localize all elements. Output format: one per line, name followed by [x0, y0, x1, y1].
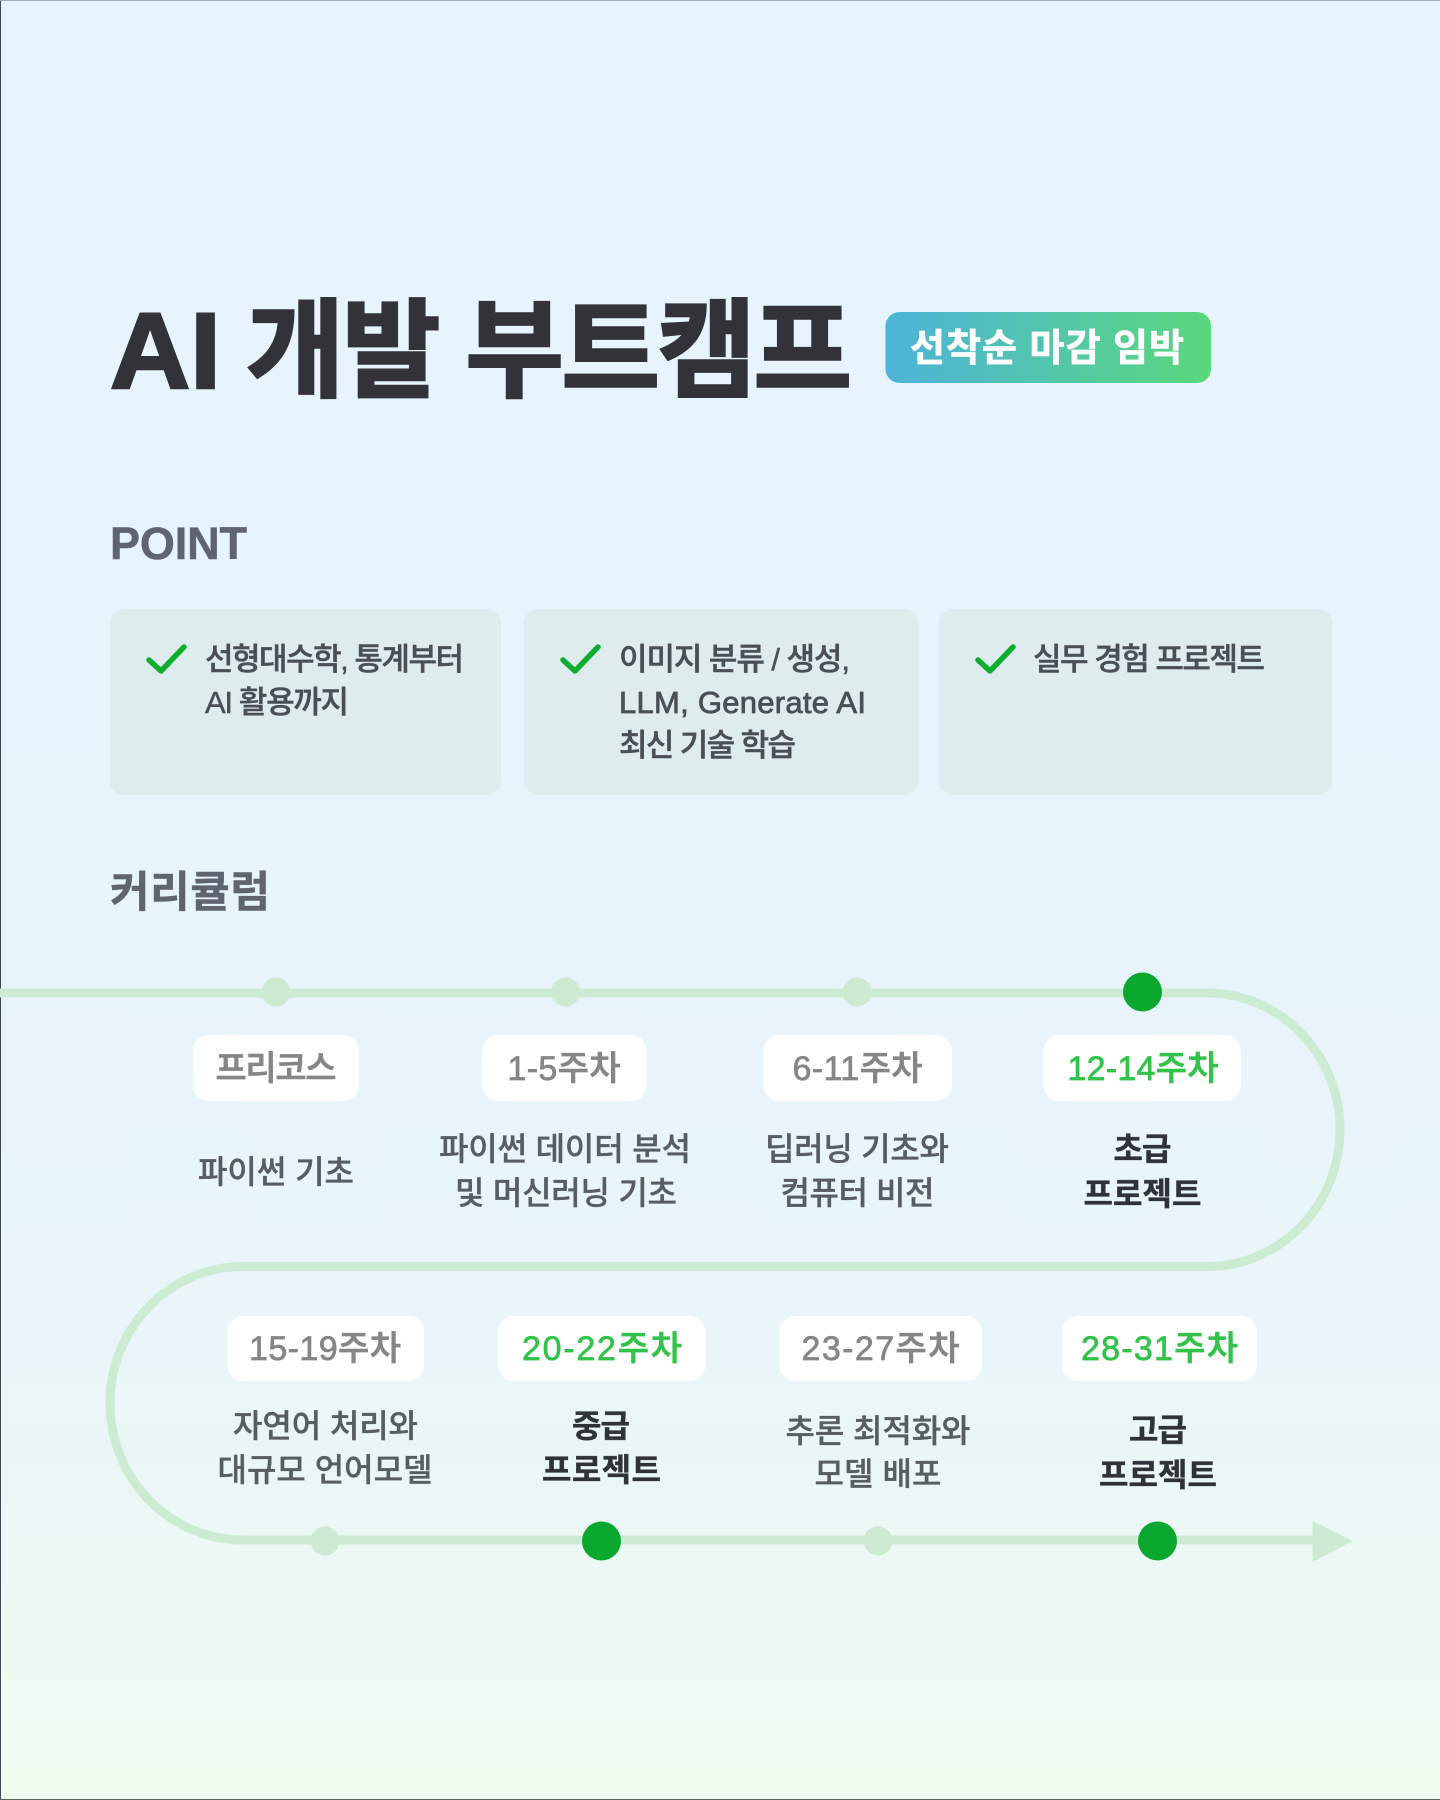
node: 12-14주차	[1123, 972, 1162, 1012]
step: 23-27주차: 모델 배포	[814, 1456, 942, 1492]
node: 프리코스	[262, 978, 290, 1006]
step: 12-14주차: 초급	[1114, 1131, 1172, 1167]
step: 12-14주차: 12-14주차	[1068, 1050, 1218, 1088]
step: 15-19주차: 15-19주차	[249, 1330, 401, 1368]
title: 개발 부트캠프	[246, 291, 852, 411]
step: 20-22주차: 20-22주차	[522, 1330, 682, 1368]
panel: point 1	[110, 609, 501, 795]
curriculum path with arrow	[0, 993, 1353, 1562]
node: 1-5주차	[551, 978, 580, 1006]
step: 1-5주차: 1-5주차	[508, 1050, 620, 1088]
step: 20-22주차: 중급	[572, 1408, 630, 1444]
step: 1-5주차	[439, 1035, 691, 1211]
panel: point 1: 선형대수학, 통계부터	[205, 642, 464, 677]
step: 20-22주차	[498, 1316, 706, 1488]
node: 20-22주차	[582, 1522, 621, 1560]
step: 15-19주차: 대규모 언어모델	[218, 1452, 432, 1488]
step: 12-14주차	[1044, 1035, 1241, 1212]
panel: point 2: LLM, Generate AI	[619, 685, 866, 720]
step: 6-11주차: 6-11주차	[792, 1050, 922, 1088]
node: 28-31주차	[1138, 1522, 1177, 1560]
title: AI	[110, 290, 221, 411]
panel: point 2: 최신 기술 학습	[619, 728, 796, 763]
step: 20-22주차: 프로젝트	[542, 1452, 661, 1488]
step: 23-27주차: 추론 최적화와	[786, 1413, 970, 1449]
node: 15-19주차	[310, 1526, 340, 1556]
step: 12-14주차: 프로젝트	[1084, 1176, 1202, 1212]
panel: point 3: 실무 경험 프로젝트	[1033, 642, 1265, 677]
step: 프리코스: 파이썬 기초	[198, 1154, 354, 1190]
heading: 커리큘럼: 커리큘럼	[110, 869, 270, 917]
panel: point 2	[524, 609, 918, 795]
badge: 선착순 마감 임박: 선착순 마감 임박	[910, 328, 1184, 370]
step: 6-11주차: 딥러닝 기초와	[765, 1131, 949, 1167]
step: 프리코스: 프리코스	[216, 1050, 336, 1088]
step: 15-19주차	[218, 1316, 432, 1488]
step: 1-5주차: 파이썬 데이터 분석	[439, 1131, 691, 1167]
step: 6-11주차	[764, 1035, 952, 1211]
step: 15-19주차: 자연어 처리와	[233, 1408, 418, 1444]
step: 6-11주차: 컴퓨터 비전	[780, 1175, 934, 1211]
step: 23-27주차	[779, 1316, 982, 1492]
panel: point 3	[938, 609, 1332, 795]
node: 6-11주차	[842, 978, 872, 1006]
panel: point 2: 이미지 분류 / 생성,	[619, 642, 850, 677]
step: 1-5주차: 및 머신러닝 기초	[455, 1175, 677, 1211]
step: 프리코스	[193, 1035, 359, 1190]
step: 23-27주차: 23-27주차	[802, 1330, 960, 1368]
node: 23-27주차	[864, 1526, 892, 1556]
badge: 선착순 마감 임박	[886, 312, 1211, 383]
step: 28-31주차: 28-31주차	[1081, 1330, 1238, 1368]
heading: POINT: POINT	[110, 518, 247, 569]
step: 28-31주차	[1062, 1316, 1257, 1493]
step: 28-31주차: 프로젝트	[1099, 1457, 1217, 1493]
step: 28-31주차: 고급	[1129, 1412, 1187, 1448]
panel: point 1: AI 활용까지	[205, 685, 349, 720]
